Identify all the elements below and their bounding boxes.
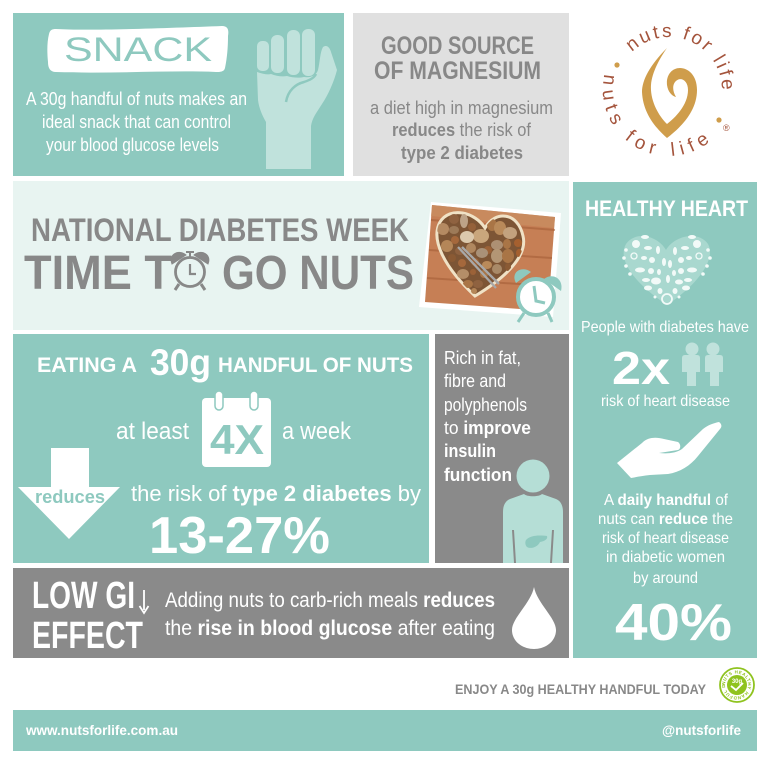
snack text: your blood glucose levels: [46, 135, 219, 155]
healthy heart stat: 2x: risk of heart disease: [601, 393, 730, 410]
panel: banner: [13, 181, 569, 330]
social handle: @nutsforlife: [662, 722, 741, 738]
logo: nuts for life: [602, 26, 734, 156]
insulin text: fibre and: [444, 371, 506, 391]
healthy heart text: by around: [633, 570, 698, 587]
magnesium heading: [374, 32, 541, 85]
stat: 40%: 40%: [615, 594, 732, 652]
healthy heart text: in diabetic women: [606, 549, 725, 566]
risk text: the risk of type 2 diabetes by: [131, 481, 421, 506]
magnesium heading: GOOD SOURCE: [381, 32, 534, 60]
footer bar: [13, 710, 757, 751]
magnesium text: a diet high in magnesium: [370, 98, 553, 118]
insulin text: function: [444, 465, 512, 485]
icon: healthy handful badge: NUTS HEALTHY HANDFUL DAILY: [722, 670, 752, 700]
snack text: ideal snack that can control: [42, 112, 231, 132]
snack text: [26, 89, 247, 155]
insulin text: [444, 348, 531, 485]
icon: floral heart: [622, 235, 712, 305]
icon: calendar 4X: 4X: [210, 416, 264, 463]
panel: snack: [13, 13, 344, 176]
icon: alarm clock in heading: [171, 252, 209, 290]
panel: low GI effect: [13, 568, 569, 658]
at least text: at least: [116, 418, 189, 445]
low GI heading: LOW GI: [32, 575, 135, 617]
icon: small down arrow: [140, 590, 148, 613]
snack label: [47, 26, 228, 73]
eating heading: EATING A: [37, 354, 137, 377]
insulin text: polyphenols: [444, 395, 527, 415]
healthy heart stat: 2x: People with diabetes have: [581, 319, 749, 336]
insulin text: insulin: [444, 441, 496, 461]
low GI heading: [32, 575, 143, 657]
magnesium text: type 2 diabetes: [401, 143, 523, 163]
logo ring text: nuts for life: [626, 26, 734, 89]
icon: teal alarm clock: [514, 269, 562, 322]
healthy heart text: [598, 492, 733, 587]
icon: two people: [682, 342, 723, 386]
healthy heart text: A daily handful of: [604, 492, 729, 509]
icon: healthy handful badge: 30g: [732, 679, 743, 685]
low GI text: the rise in blood glucose after eating: [165, 617, 495, 640]
panel: healthy heart: [573, 182, 757, 658]
panel: insulin function: [435, 334, 569, 563]
logo mark: [642, 48, 697, 138]
healthy heart stat: 2x: 2x: [612, 342, 670, 394]
photo: heart bowl of nuts: [419, 202, 561, 317]
banner heading: NATIONAL DIABETES WEEK: [31, 212, 409, 248]
healthy handful tagline: ENJOY A 30g HEALTHY HANDFUL TODAY: [455, 682, 706, 697]
a week text: a week: [282, 418, 352, 445]
logo ring text: nuts for life: [602, 75, 708, 156]
low GI heading: EFFECT: [32, 615, 143, 657]
low GI text: Adding nuts to carb-rich meals reduces: [165, 589, 495, 612]
icon: reduces arrow: reduces: [35, 487, 105, 507]
panel: good source of magnesium: [353, 13, 569, 176]
banner heading: [24, 212, 414, 300]
icon: fist: [257, 29, 337, 169]
eating heading: 30g: [150, 342, 211, 383]
panel: eating a 30g handful: [13, 334, 429, 565]
banner heading: GO NUTS: [222, 247, 414, 300]
healthy heart stat: 2x: [581, 319, 749, 410]
snack label: SNACK: [64, 31, 212, 69]
stat: 13-27%: 13-27%: [149, 507, 330, 565]
icon: calendar 4X: [202, 391, 271, 467]
healthy heart heading: HEALTHY HEART: [585, 196, 748, 221]
magnesium text: reduces the risk of: [392, 120, 532, 140]
banner heading: TIME T: [24, 247, 172, 300]
low GI text: [165, 589, 495, 640]
magnesium text: [370, 98, 553, 163]
insulin text: to improve: [444, 418, 531, 438]
logo ring text: ®: [723, 123, 730, 133]
eating heading: [37, 342, 413, 383]
snack text: A 30g handful of nuts makes an: [26, 89, 247, 109]
logo ring text: [602, 26, 734, 156]
website: www.nutsforlife.com.au: [25, 722, 178, 738]
insulin text: Rich in fat,: [444, 348, 521, 368]
icon: glucose drop: [512, 587, 556, 649]
magnesium heading: OF MAGNESIUM: [374, 57, 541, 85]
healthy heart text: risk of heart disease: [602, 530, 729, 547]
eating heading: HANDFUL OF NUTS: [218, 354, 413, 377]
icon: open hand: [617, 422, 721, 478]
healthy heart text: nuts can reduce the: [598, 511, 733, 528]
icon: reduces arrow: [18, 448, 120, 539]
icon: body with pancreas: [503, 460, 563, 563]
